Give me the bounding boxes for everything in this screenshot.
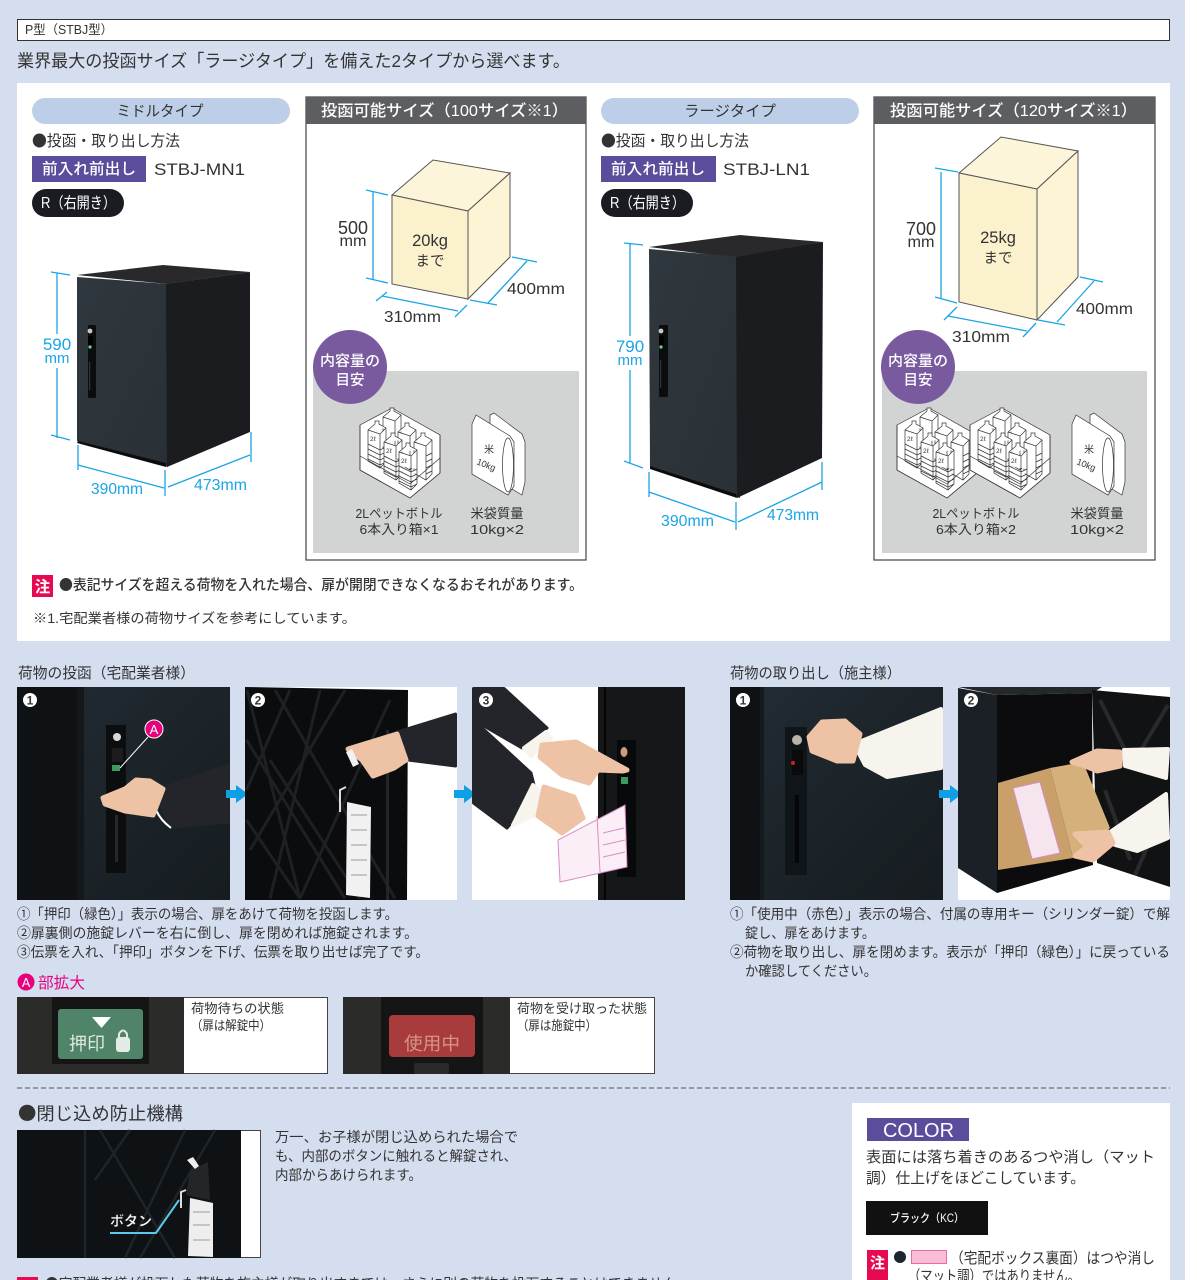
color description	[866, 1149, 1155, 1187]
icon: PET bottle crate 1: 2ℓ	[923, 448, 930, 455]
icon: PET bottle crate 2: 2ℓ	[980, 436, 987, 443]
retrieval instructions text: か確認してください。	[745, 963, 877, 979]
icon: PET bottle crate 2: 2ℓ	[996, 448, 1003, 455]
large cabinet dimensions: mm	[618, 352, 642, 369]
delivery instructions text: ①「押印（緑色）」表示の場合、扉をあけて荷物を投函します。	[17, 906, 398, 922]
anti-entrapment description: も、内部のボタンに触れると解錠され、	[275, 1148, 517, 1164]
panel: color	[852, 1103, 1170, 1280]
retrieval instructions text	[730, 906, 1170, 979]
middle right-opening pill	[32, 189, 124, 217]
middle right-opening pill: R（右開き）	[41, 194, 116, 212]
size panel header: 投函可能サイズ（120サイズ※1）	[890, 101, 1137, 120]
state panel: awaiting parcel	[17, 997, 328, 1074]
heading: A part enlarged	[18, 974, 85, 992]
large cabinet dimensions: 390mm	[661, 513, 714, 530]
arrow	[454, 785, 476, 803]
contents guide badge	[881, 330, 955, 404]
large type heading: ラージタイプ	[684, 103, 776, 120]
icon: PET bottle crate 2	[970, 408, 1050, 498]
middle cabinet dimensions: 473mm	[194, 477, 247, 494]
contents labels: 2Lペットボトル	[932, 506, 1020, 521]
parcel box 120: まで	[984, 251, 1012, 267]
delivery instructions text	[17, 906, 429, 960]
parcel dimensions 120: mm	[908, 234, 934, 251]
number badge 2: 2	[255, 694, 262, 708]
middle type heading	[32, 98, 290, 124]
photo: retrieval step 1	[730, 687, 943, 900]
color description: 調）仕上げをほどこしています。	[866, 1170, 1085, 1187]
anti-entrapment description: 万一、お子様が閉じ込められた場合で	[275, 1129, 518, 1145]
middle cabinet dimensions: 590	[43, 335, 71, 354]
parcel dimensions 120: 700	[906, 219, 936, 239]
contents guide badge: 目安	[336, 372, 364, 389]
number badge 1: 1	[27, 694, 34, 708]
contents labels: 10kg×2	[1070, 522, 1124, 537]
header: model type box	[18, 20, 1170, 40]
number badge 2: 2	[968, 694, 975, 708]
header: model type box: P型（STBJ型）	[25, 23, 113, 37]
arrow	[939, 785, 962, 803]
icon: PET bottle crate: 2ℓ	[401, 458, 408, 465]
icon: rice bags: 10kg	[1075, 457, 1097, 473]
heading: anti-entrapment mechanism: ●閉じ込め防止機構	[18, 1100, 183, 1126]
color description: 表面には落ち着きのあるつや消し（マット	[866, 1149, 1155, 1166]
photo: retrieval step 2	[958, 687, 1170, 900]
retrieval instructions text: 錠し、扉をあけます。	[745, 925, 875, 941]
photo: delivery step 3	[472, 687, 685, 900]
heading: delivery steps: 荷物の投函（宅配業者様）	[18, 665, 195, 682]
icon: rice bags: 米	[484, 443, 494, 456]
retrieval instructions text: ①「使用中（赤色）」表示の場合、付属の専用キー（シリンダー錠）で解	[730, 906, 1170, 922]
contents guide area	[882, 371, 1147, 553]
color caution note	[867, 1250, 1155, 1280]
callout label: ボタン	[110, 1213, 152, 1229]
arrow	[226, 785, 248, 803]
large type tag: front in front out: 前入れ前出し	[611, 160, 705, 178]
contents labels: 6本入り箱×2	[936, 522, 1016, 537]
state panel: awaiting parcel: 荷物待ちの状態	[191, 1001, 284, 1016]
number badge 2	[964, 693, 978, 708]
delivery instructions text: ②扉裏側の施錠レバーを右に倒し、扉を閉めれば施錠されます。	[17, 925, 418, 941]
caution note: ●表記サイズを超える荷物を入れた場合、扉が開閉できなくなるおそれがあります。	[59, 574, 583, 595]
large type heading	[601, 98, 859, 124]
contents guide badge: 内容量の	[320, 353, 380, 370]
heading: A part enlarged: 部拡大	[38, 974, 85, 992]
parcel box 120: 25kg	[980, 229, 1016, 247]
color swatch: black: ブラック（KC）	[890, 1211, 964, 1225]
icon: rice bags	[472, 413, 525, 495]
heading: retrieval steps: 荷物の取り出し（施主様）	[730, 665, 901, 682]
parcel dimensions 100: 310mm	[384, 309, 441, 326]
contents guide badge: 目安	[904, 372, 932, 389]
contents guide badge	[313, 330, 387, 404]
color caution note: （宅配ボックス裏面）はつや消し	[950, 1250, 1155, 1267]
number badge 1	[736, 693, 750, 708]
parcel dimensions 100: 500	[338, 218, 368, 238]
title: 業界最大の投函サイズ「ラージタイプ」を備えた2タイプから選べます。	[17, 51, 570, 71]
anti-entrapment description	[275, 1129, 518, 1183]
contents labels: 2Lペットボトル	[356, 506, 442, 521]
middle model number: STBJ-MN1	[154, 160, 245, 179]
callout marker A: A	[150, 722, 159, 737]
large right-opening pill: R（右開き）	[610, 194, 685, 212]
contents labels	[356, 506, 524, 537]
parcel dimensions 120: 400mm	[1076, 301, 1133, 318]
state panel: awaiting parcel: （扉は解錠中）	[191, 1018, 271, 1033]
contents labels: 米袋質量	[1070, 506, 1124, 521]
contents labels: 6本入り箱×1	[360, 522, 438, 537]
caution note: 注	[35, 578, 51, 596]
icon: rice bags	[1072, 413, 1125, 495]
panel: middle deliverable size	[306, 97, 586, 560]
parcel box 100: 20kg	[412, 232, 448, 250]
large cabinet dimensions	[616, 243, 822, 530]
large cabinet dimensions: 790	[616, 337, 644, 356]
product: large cabinet	[649, 235, 823, 498]
large type tag: front in front out	[601, 156, 716, 182]
number badge 3: 3	[483, 694, 490, 708]
contents labels: 米袋質量	[470, 506, 524, 521]
large type method: ●投函・取り出し方法	[601, 129, 749, 151]
parcel box 120	[959, 137, 1078, 320]
icon: PET bottle crate 1: 2ℓ	[938, 458, 945, 465]
icon: PET bottle crate 1	[897, 408, 977, 498]
parcel dimensions 100: 400mm	[507, 281, 565, 298]
footnote: ※1.宅配業者様の荷物サイズを参考にしています。	[33, 611, 356, 626]
state panel: parcel received: （扉は施錠中）	[517, 1018, 597, 1033]
large model number: STBJ-LN1	[723, 160, 810, 179]
middle cabinet dimensions: 390mm	[91, 481, 143, 498]
color swatch: black	[866, 1201, 988, 1235]
middle type heading: ミドルタイプ	[116, 103, 204, 120]
anti-entrapment description: 内部からあけられます。	[275, 1167, 422, 1183]
contents guide badge: 内容量の	[888, 353, 948, 370]
middle cabinet dimensions	[43, 272, 251, 498]
middle cabinet dimensions: mm	[44, 350, 70, 367]
middle type tag: front in front out	[32, 156, 146, 182]
contents labels: 10kg×2	[470, 522, 524, 537]
product: middle cabinet	[77, 265, 250, 467]
middle type method: ●投函・取り出し方法	[32, 129, 180, 151]
icon: PET bottle crate	[360, 408, 440, 498]
icon: PET bottle crate: 2ℓ	[386, 448, 393, 455]
parcel box 100	[392, 160, 510, 299]
callout leader line	[110, 1200, 179, 1233]
large cabinet dimensions: 473mm	[767, 507, 819, 524]
icon: rice bags: 米	[1084, 443, 1094, 456]
color heading	[867, 1118, 969, 1142]
photo: delivery step 2	[245, 687, 457, 900]
parcel dimensions 120	[906, 168, 1133, 346]
parcel dimensions 100: mm	[340, 233, 366, 250]
panel: large deliverable size	[874, 97, 1155, 560]
number badge 1: 1	[740, 694, 747, 708]
number badge 2	[251, 693, 265, 708]
middle type tag: front in front out: 前入れ前出し	[42, 160, 136, 178]
delivery instructions text: ③伝票を入れ、「押印」ボタンを下げ、伝票を取り出せば完了です。	[17, 944, 429, 960]
contents labels	[932, 506, 1124, 537]
large right-opening pill	[601, 189, 693, 217]
heading: A part enlarged: A	[22, 976, 31, 990]
photo: delivery step 1	[17, 687, 230, 900]
parcel dimensions 120: 310mm	[952, 329, 1010, 346]
size panel header	[874, 97, 1155, 124]
retrieval instructions text: ②荷物を取り出し、扉を閉めます。表示が「押印（緑色）」に戻っている	[730, 944, 1170, 960]
size panel header: 投函可能サイズ（100サイズ※1）	[321, 101, 568, 120]
state panel: parcel received: 使用中	[404, 1034, 460, 1054]
number badge 1	[23, 693, 37, 708]
icon: PET bottle crate 1: 2ℓ	[907, 436, 914, 443]
icon: rice bags: 10kg	[475, 457, 497, 473]
state panel: parcel received	[343, 997, 654, 1074]
contents guide area	[313, 371, 579, 553]
state panel: parcel received: 荷物を受け取った状態	[517, 1001, 647, 1016]
size panel header	[306, 97, 586, 124]
state panel: awaiting parcel: 押印	[69, 1034, 105, 1054]
icon: PET bottle crate 2: 2ℓ	[1011, 458, 1018, 465]
panel: two types	[17, 83, 1170, 641]
icon: PET bottle crate: 2ℓ	[370, 436, 377, 443]
color caution note: 注	[870, 1254, 885, 1272]
parcel box 100: まで	[416, 254, 444, 270]
photo: anti-entrapment button	[17, 1130, 260, 1258]
callout marker A	[120, 720, 163, 768]
parcel dimensions 100	[338, 190, 565, 326]
number badge 3	[479, 693, 493, 708]
color heading: COLOR	[883, 1120, 954, 1142]
